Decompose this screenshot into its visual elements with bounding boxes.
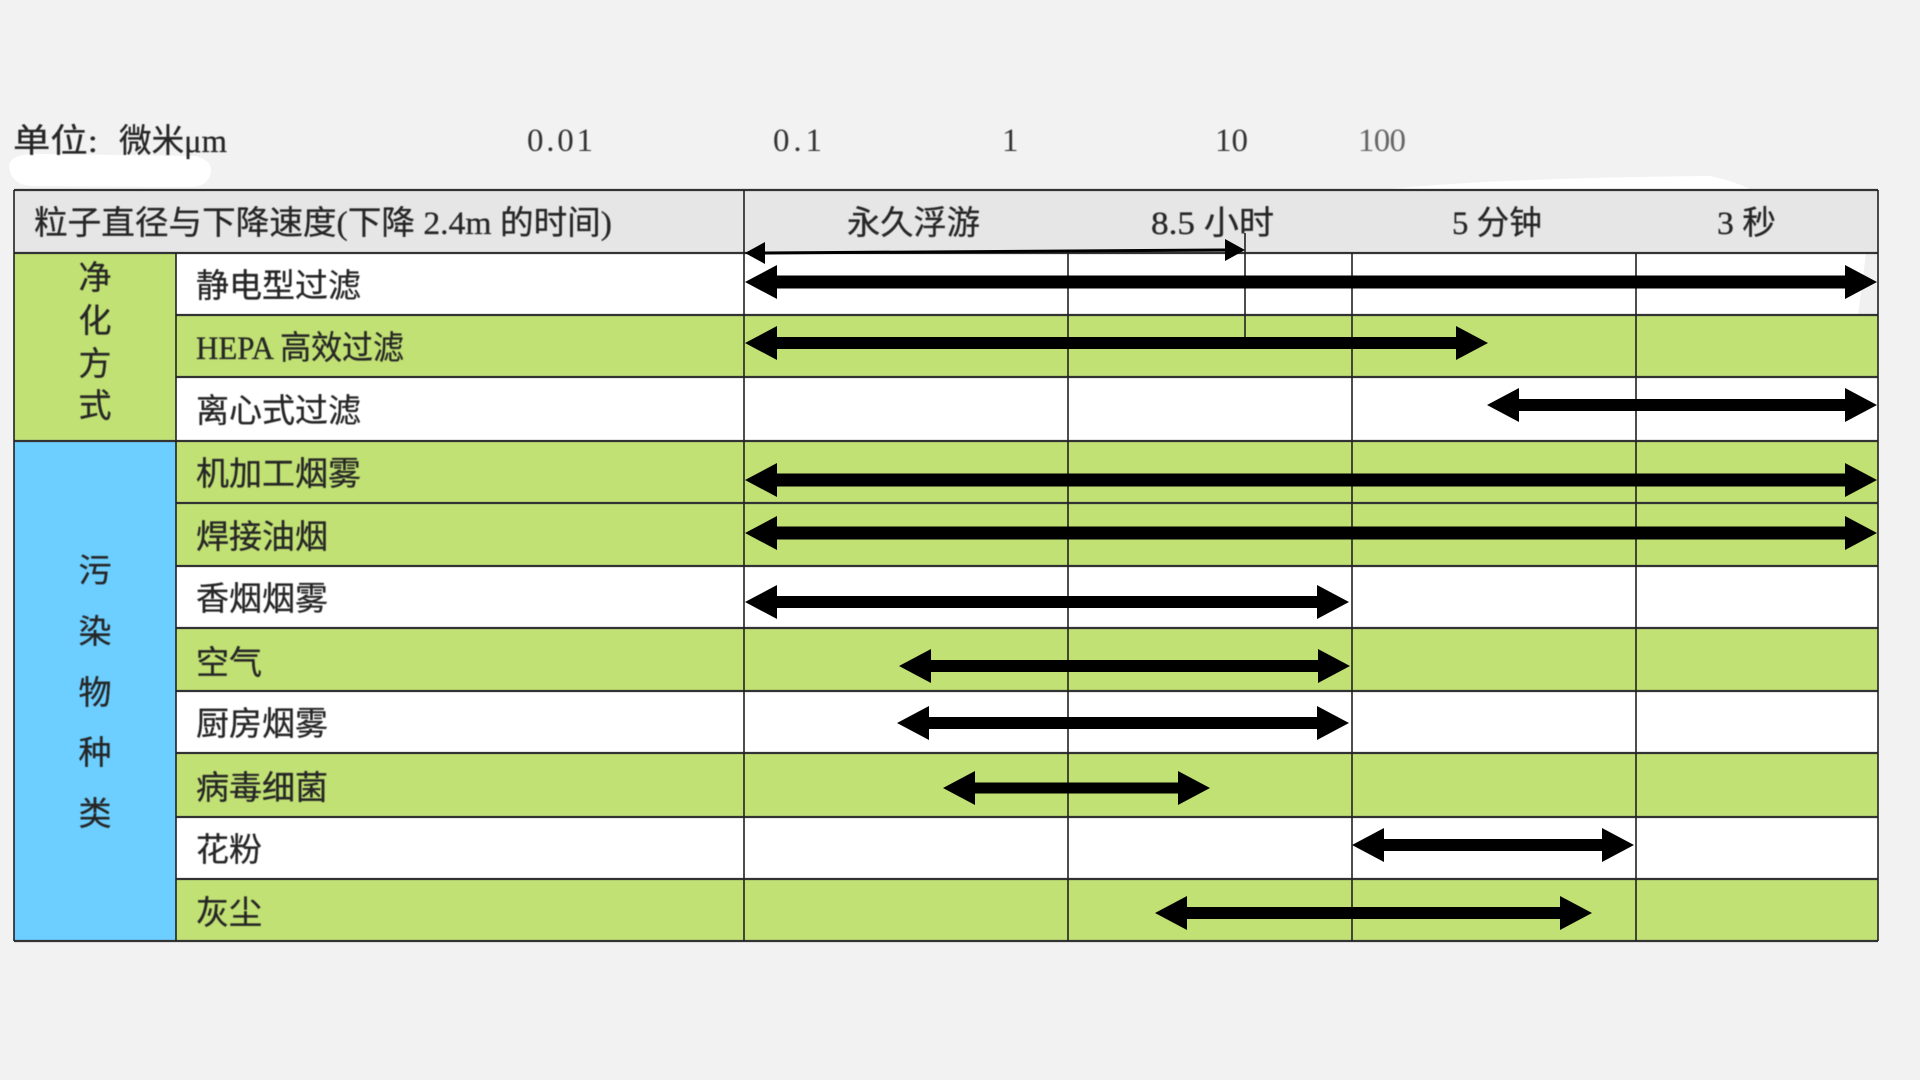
header title: 粒子直径与下降速度(下降 2.4m 的时间) [34,205,612,242]
label: kitchen fume: 厨房烟雾 [196,706,328,743]
arrow: machining mist range [745,463,1877,497]
particle size axis [527,123,1406,159]
panel: purification methods [14,253,176,441]
label: cigarette smoke: 香烟烟雾 [196,582,328,618]
arrow: virus and bacteria range [943,771,1210,805]
panel: purification methods: 式 [78,388,112,425]
panel: pollutant types: 染 [78,614,112,651]
label: dust: 灰尘 [196,895,262,932]
header: 8.5 hours: 8.5 小时 [1151,206,1274,242]
range arrows [745,239,1877,930]
unit label [13,123,227,160]
arrow: top reference range [745,239,1245,264]
axis value 0.1: 0.1 [773,123,822,159]
unit label: 微米μm [119,123,227,160]
table [14,190,1878,941]
unit label: 单位: [13,123,98,160]
label: viruses and bacteria: 病毒细菌 [196,770,328,807]
panel: pollutant types: 物 [78,675,112,712]
label: HEPA filter: HEPA 高效过滤 [196,330,404,367]
row labels [196,268,404,932]
arrow: welding fume range [745,516,1877,550]
arrow: electrostatic filter range [745,265,1877,299]
axis value 1: 1 [1002,123,1018,159]
panel: pollutant types: 类 [78,796,112,833]
arrow: air range [899,649,1350,683]
panel: pollutant types: 种 [78,735,112,772]
panel: purification methods: 净 [78,260,112,297]
axis value 100: 100 [1358,123,1406,159]
label: air: 空气 [196,645,262,682]
label: centrifugal filter: 离心式过滤 [196,393,361,430]
panel: pollutant types: 污 [78,554,112,590]
label: electrostatic filter: 静电型过滤 [196,268,361,305]
arrow: centrifugal range [1487,388,1877,422]
arrow: dust range [1155,896,1592,930]
panel: purification methods: 化 [78,303,112,340]
arrow: HEPA range [745,326,1488,360]
label: pollen: 花粉 [196,832,262,869]
header: 3 seconds: 3 秒 [1717,205,1776,242]
table header row [14,190,1878,253]
header: 5 minutes: 5 分钟 [1452,205,1542,242]
panel: pollutant types [14,441,176,941]
label: welding fume: 焊接油烟 [196,519,328,556]
panel: purification methods: 方 [78,346,112,383]
header: permanent float: 永久浮游 [847,205,980,242]
axis value 0.01: 0.01 [527,123,593,159]
arrow: pollen range [1352,828,1634,862]
row backgrounds [176,253,1878,941]
label: machining mist: 机加工烟雾 [196,456,361,493]
axis value 10: 10 [1215,123,1248,159]
arrow: cigarette smoke range [745,585,1349,619]
arrow: kitchen fume range [897,706,1349,740]
